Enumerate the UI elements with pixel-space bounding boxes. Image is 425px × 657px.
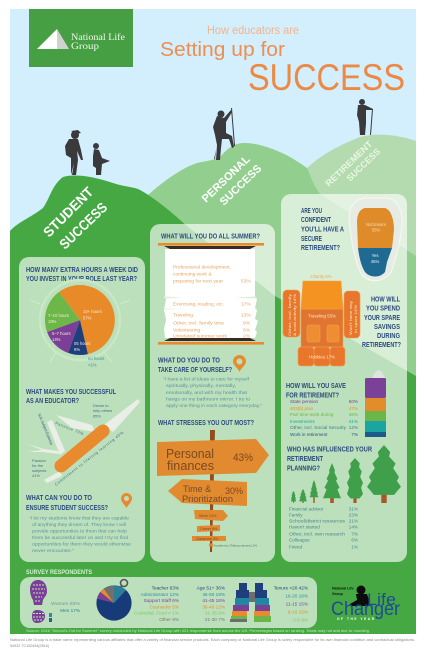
pie chart: extra hours: <1%: [88, 362, 97, 368]
logo: life changer of the year: Changer: [331, 599, 401, 620]
list: age: Age 51+ 36%: [197, 586, 225, 590]
pie chart: extra hours: 05 hours: [74, 341, 90, 346]
panel: student success: [19, 257, 145, 562]
list: tenure: [274, 586, 308, 622]
hiker on personal hill: [213, 108, 235, 160]
list: influences: 6%: [351, 538, 358, 542]
title: Setting up for: [160, 39, 285, 61]
heading: survey respondents: SURVEY RESPONDENTS: [26, 569, 93, 576]
heading: influenced: RETIREMENT: [287, 456, 324, 463]
heading: influenced: WHO HAS INFLUENCED YOUR: [287, 446, 372, 454]
heading: spare savings: RETIREMENT?: [362, 342, 401, 349]
list: influences: 31%: [349, 506, 358, 512]
heading: confident: YOU'LL HAVE A: [301, 226, 344, 234]
heading: spare savings: DURING: [377, 333, 400, 340]
scroll list: summer plans: Unrelated summer work: [173, 334, 228, 340]
bottle chart: retirement savings: [365, 370, 386, 437]
footnote: source: Source: 2016 "School's Out for Summer" survey conducted by National Life Group with 421 respondents from across the US. Percentages based on ranking. Totals may not add due to rounding.: [26, 629, 370, 633]
list: influences: Other, incl. own research: [289, 532, 345, 536]
heading: stresses: WHAT STRESSES YOU OUT MOST?: [158, 420, 254, 427]
list: influences: 23%: [349, 512, 358, 518]
list: ways to save: [290, 399, 358, 437]
icon: binoculars tenure chart: [230, 583, 271, 622]
quote: self care: emotionally, and with my health that: [166, 390, 248, 395]
scroll list: summer plans: Other, incl. family time: [173, 320, 224, 326]
pocket knife chart: help others: [93, 408, 112, 413]
pie chart: extra hours: 7–10 hours: [48, 313, 69, 318]
list: ways to save: 12%: [349, 425, 358, 430]
list: tenure: 0-5 9%: [293, 618, 308, 622]
pocket knife chart: 41%: [32, 473, 40, 478]
logo: life changer of the year: [331, 586, 401, 621]
icon: location pin: [233, 355, 246, 372]
heading: influenced: [287, 446, 372, 472]
signpost chart: stresses: finances: [167, 458, 214, 473]
list: job role: Other 9%: [159, 617, 179, 622]
list: ways to save: Investments: [290, 419, 315, 424]
heading: confident: ARE YOU: [301, 208, 322, 215]
icon: boot prints gender chart: [30, 580, 80, 623]
logo: life changer of the year: National Life: [332, 586, 354, 590]
backpack chart: spare savings: Traveling 55%: [308, 314, 336, 318]
heading: spare savings: [362, 296, 401, 349]
quote: student success: provide opportunities to them that can help: [32, 528, 127, 534]
heading: extra hours: YOU INVEST IN YOUR ROLE LAST YEAR?: [26, 276, 137, 283]
pie chart: extra hours: 5–7 hours: [52, 331, 71, 336]
signpost chart: stresses: Classroom 5%: [196, 537, 218, 541]
footnote: disclaimer: National Life Group is a trade name representing various affiliates that offer a variety of financial service products. Each company of National Life Group is solely responsible for its own financial condition and contractual obligations.: [10, 638, 415, 642]
quote: self care: “I have a list of ideas to care for myself: [163, 376, 250, 382]
pocket knife chart: Commitment to lifelong learning 45%: [54, 430, 125, 487]
list: ways to save: 50%: [349, 399, 358, 404]
pocket knife chart: for the: [32, 463, 43, 468]
pie chart: extra hours: 19%: [48, 319, 57, 324]
heading: spare savings: SAVINGS: [374, 324, 400, 331]
heading: extra hours: [26, 267, 138, 283]
scroll list: summer plans: 2%: [243, 334, 251, 340]
quote: self care: apply one thing in each category everyday.”: [166, 403, 262, 408]
list: job role: Support Staff 6%: [144, 598, 179, 603]
list: job role: Administrator 12%: [141, 592, 179, 597]
list: job role: Counselor 5%: [150, 604, 179, 610]
pocket knife chart: subjects: [32, 468, 46, 473]
backpack chart: spare savings: to spare 14%: [353, 304, 358, 333]
list: influences: Financial advisor: [289, 506, 324, 512]
panel: survey respondents: [20, 577, 317, 628]
signpost chart: stresses: Prioritization: [182, 494, 233, 504]
signpost chart: stresses: Career 8%: [200, 527, 218, 531]
title: [160, 25, 405, 98]
heading: successful educator: [26, 389, 117, 405]
heading: confident: CONFIDENT: [301, 217, 332, 224]
pie chart: extra hours: 10+ hours: [83, 309, 102, 314]
heading: spare savings: YOUR SPARE: [364, 315, 400, 322]
quote: student success: opportunities for them they would otherwise: [32, 542, 131, 546]
retirement hill: [300, 135, 416, 400]
heading: spare savings: YOU SPEND: [366, 306, 400, 312]
pocket knife chart: Passion: [32, 458, 46, 463]
list: ways to save: 47%: [349, 406, 358, 411]
scroll list: summer plans: Volunteering: [173, 328, 200, 334]
heading: student success advice: WHAT CAN YOU DO TO: [26, 495, 92, 502]
signpost chart: stresses: Time &: [183, 484, 211, 494]
list: age: 21-30 7%: [205, 617, 225, 622]
scroll list: summer plans: Exercising, reading, etc.: [173, 302, 224, 308]
quote: self care: [163, 376, 262, 408]
quote: student success: “I let my students know that they are capable: [29, 516, 129, 520]
list: tenure: Tenure >20 42%: [274, 586, 308, 590]
signpost chart: stresses: Work 13%: [199, 514, 217, 518]
pocket knife chart: Patience 70%: [55, 420, 85, 436]
pocket knife chart: Sub. Subject Expertise: [37, 413, 54, 446]
scroll list: summer plans: Traveling: [173, 312, 193, 318]
scroll list: summer plans: 53%: [241, 278, 251, 284]
heading: spare savings: HOW WILL: [371, 296, 401, 304]
footnote: disclaimer: 54932 TC100454(0516): [10, 644, 49, 648]
scroll list: summer plans: 13%: [241, 312, 251, 318]
list: tenure: 6-10 16%: [288, 610, 308, 614]
quote: self care: hangs on my bathroom mirror. I try to: [166, 396, 250, 402]
heading: successful educator: AS AN EDUCATOR?: [26, 398, 79, 405]
heading: save for retirement: [286, 383, 346, 400]
scroll list: summer plans: Professional development,: [173, 264, 231, 270]
list: influences: [289, 506, 358, 550]
logo: life changer of the year: OF THE YEAR: [337, 617, 375, 621]
quote: self care: spiritually, physically, mentally,: [166, 383, 236, 388]
carabiner chart: confidence: No/Unsure: [366, 222, 387, 227]
list: ways to save: 403(b) plan: [290, 406, 314, 411]
quote: student success: [29, 516, 131, 553]
pie chart: extra hours: [30, 280, 130, 368]
heading: personal success: PERSONAL: [200, 153, 253, 205]
logo: National Life: [71, 32, 125, 42]
carabiner chart: confidence: 55%: [372, 228, 380, 232]
heading: influenced: PLANNING?: [287, 466, 320, 472]
list: age: 31-35 9%: [205, 610, 225, 616]
list: age: 46-50 19%: [202, 592, 225, 597]
list: influences: Colleague: [289, 538, 310, 542]
panel: retirement success: [281, 194, 407, 562]
list: influences: 21%: [349, 518, 358, 524]
list: influences: 14%: [349, 524, 358, 530]
pocket knife chart: [27, 399, 140, 487]
tree chart: influences: [291, 445, 401, 503]
list: ways to save: State pension: [290, 399, 319, 404]
pie chart: extra hours: 57%: [83, 316, 92, 320]
title: SUCCESS: [248, 57, 405, 98]
heading: take care: TAKE CARE OF YOURSELF?: [158, 367, 232, 374]
heading: confident: RETIREMENT?: [301, 245, 340, 252]
footnote: disclaimer: [10, 638, 415, 648]
scroll list: summer plans: [158, 243, 264, 345]
backpack chart: spare savings: [283, 274, 360, 366]
list: influences: Family: [289, 512, 303, 518]
carabiner chart: confidence: 45%: [371, 259, 379, 264]
heading: take care: WHAT DO YOU DO TO: [158, 358, 220, 364]
list: age: 41-45 18%: [202, 598, 225, 603]
heading: student success advice: ENSURE STUDENT SUCCESS?: [26, 505, 108, 512]
scroll list: summer plans: 6%: [243, 328, 251, 334]
title: How educators are: [207, 25, 299, 37]
icon: boot prints gender chart: Women 83%: [51, 601, 80, 606]
backpack chart: spare savings: Other, incl. family: [287, 294, 292, 336]
heading: extra hours: HOW MANY EXTRA HOURS A WEEK DID: [26, 267, 138, 274]
signpost chart: stresses: [157, 430, 269, 552]
pie chart: extra hours: 14%: [52, 337, 61, 342]
list: influences: Haven't started: [289, 524, 320, 530]
heading: retirement success: RETIREMENT: [323, 139, 375, 188]
heading: successful educator: WHAT MAKES YOU SUCCESSFUL: [26, 389, 117, 396]
heading: confident: [301, 208, 344, 252]
carabiner chart: confidence: Yes: [372, 253, 378, 258]
pie chart: job role: [96, 580, 132, 621]
scroll list: summer plans: 17%: [241, 302, 251, 308]
heading: student success: STUDENT: [40, 183, 97, 240]
scroll list: summer plans: continuing work &: [173, 272, 212, 278]
list: job role: [134, 586, 179, 622]
signpost chart: stresses: 43%: [233, 452, 253, 464]
list: ways to save: 46%: [349, 412, 358, 417]
heading: save for retirement: FOR RETIREMENT?: [286, 392, 339, 400]
personal hill: [140, 143, 416, 420]
heading: student success: SUCCESS: [56, 199, 110, 252]
backpack chart: spare savings: Won't have any: [348, 301, 353, 335]
heading: retirement success: SUCCESS: [344, 146, 382, 183]
logo: [29, 9, 133, 67]
heading: confident: SECURE: [301, 236, 322, 243]
list: job role: Custodial, Food < 1%: [134, 610, 179, 616]
list: age: 36-40 12%: [202, 604, 225, 610]
backpack chart: spare savings: & cost activity 14%: [292, 293, 297, 336]
heading: student success: [40, 183, 110, 252]
panel: personal success: [150, 224, 275, 562]
signpost chart: stresses: Academics (Taking classes) 1%: [214, 544, 257, 548]
quote: student success: them be successful later on and I try to find: [32, 535, 128, 540]
signpost chart: stresses: 30%: [225, 486, 243, 496]
list: ways to save: 7%: [351, 432, 358, 437]
list: ways to save: Other, incl. Social Security: [290, 425, 347, 430]
list: influences: 1%: [351, 544, 358, 550]
icon: location pin: [121, 493, 132, 508]
pocket knife chart: Desire to: [93, 403, 109, 408]
heading: student success advice: [26, 495, 108, 512]
logo: life changer of the year: Life: [367, 590, 396, 609]
heading: summer: WHAT WILL YOU DO ALL SUMMER?: [161, 234, 260, 240]
list: ways to save: Part time work during: [290, 412, 334, 417]
list: ways to save: Work in retirement: [290, 432, 328, 437]
quote: student success: never encounter.”: [32, 548, 75, 553]
backpack chart: spare savings: Charity 5%: [310, 274, 332, 279]
scroll list: summer plans: preparing for next year: [173, 278, 223, 284]
list: tenure: 16-20 18%: [285, 594, 308, 598]
list: job role: Teacher 63%: [152, 586, 179, 590]
icon: boot prints gender chart: Men 17%: [60, 608, 80, 613]
heading: save for retirement: HOW WILL YOU SAVE: [286, 383, 346, 390]
heading: personal success: SUCCESS: [218, 163, 264, 208]
signpost chart: stresses: Personal: [166, 446, 214, 461]
list: influences: 7%: [351, 532, 358, 536]
hiker on retirement hill: [357, 99, 373, 135]
hikers on student hill: [65, 130, 110, 175]
pocket knife chart: 65%: [93, 414, 101, 418]
list: influences: School/district resources: [289, 518, 346, 524]
list: ways to save: 41%: [349, 419, 358, 424]
pie chart: extra hours: no hours: [88, 356, 104, 361]
scroll list: summer plans: 9%: [243, 320, 251, 326]
quote: student success: of anything they dream of. They know I will: [32, 522, 126, 527]
backpack chart: spare savings: Hobbies 17%: [309, 354, 335, 360]
logo: Group: [71, 41, 100, 51]
list: tenure: 11-15 15%: [286, 602, 308, 606]
list: influences: Friend: [289, 544, 302, 550]
heading: take care: [158, 358, 232, 374]
student hill and lower ground: [10, 175, 416, 634]
logo: life changer of the year: Group: [332, 592, 344, 596]
list: age: [197, 586, 225, 622]
carabiner chart: confidence: [349, 198, 402, 281]
pie chart: extra hours: 9%: [74, 347, 80, 352]
